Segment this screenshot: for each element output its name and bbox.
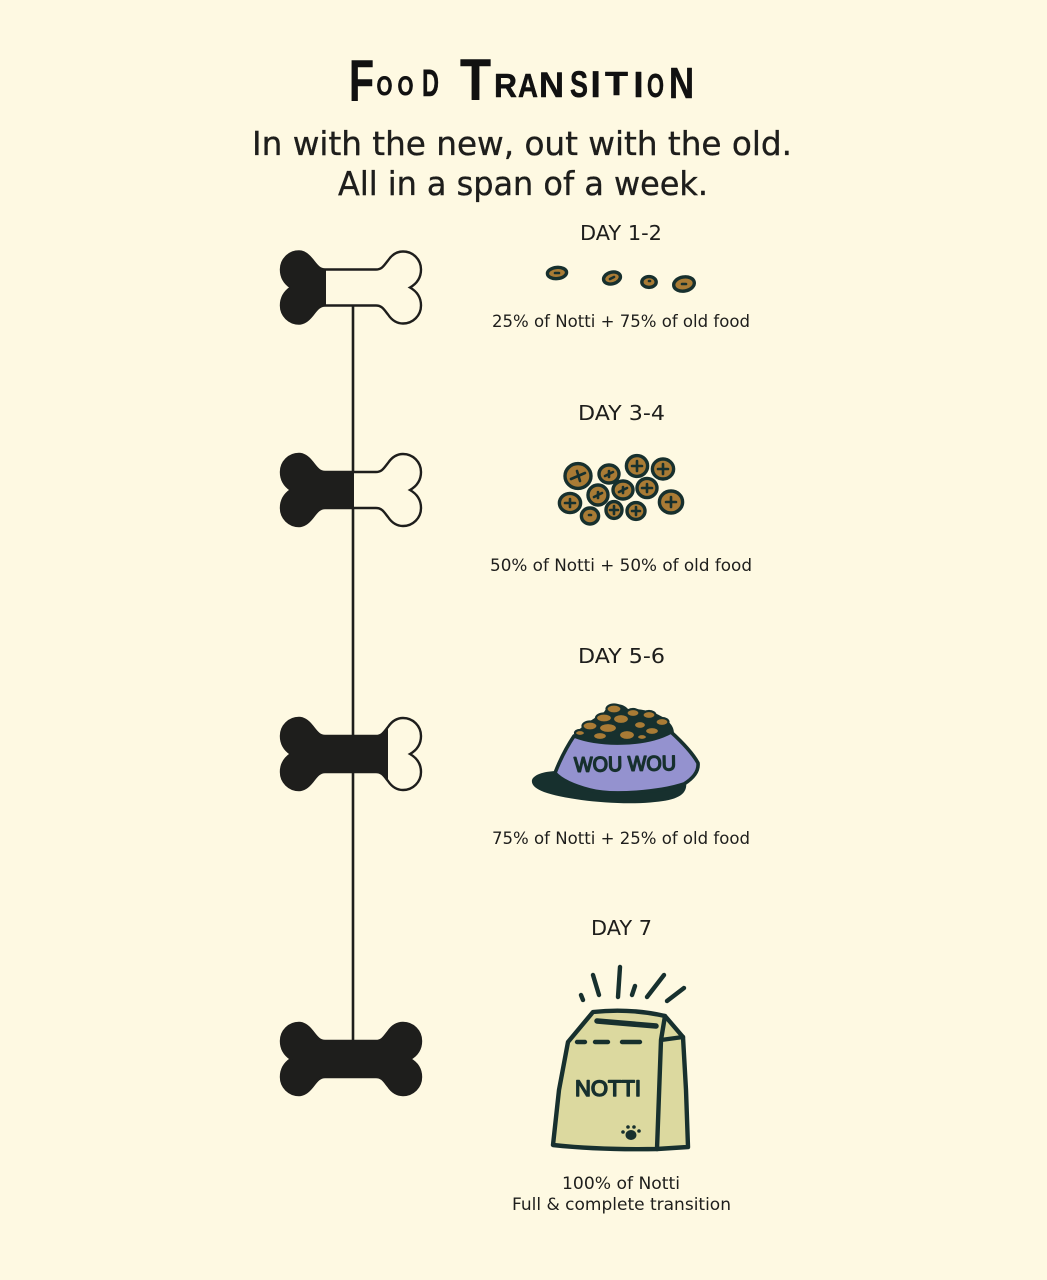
bowl shadow	[532, 771, 686, 803]
title: N	[669, 59, 694, 108]
day 7 caption: Full & complete transition	[512, 1195, 731, 1215]
title: T	[605, 65, 628, 102]
day 3-4 label: DAY 3-4	[578, 401, 665, 425]
day 1-2 caption: 25% of Notti + 75% of old food	[492, 312, 750, 332]
bag brand: NOTTI	[575, 1076, 641, 1101]
day 5-6 caption: 75% of Notti + 25% of old food	[492, 829, 750, 849]
title: O	[376, 71, 392, 101]
step: day 7	[512, 916, 731, 1215]
bag folds and handle	[577, 1016, 683, 1149]
title: O	[647, 67, 664, 104]
day 7 caption: 100% of Notti	[562, 1174, 680, 1194]
step: day 3-4	[490, 401, 752, 576]
title: A	[518, 67, 538, 104]
day 7 caption	[512, 1174, 731, 1215]
bone: fully filled	[281, 1023, 421, 1095]
bowl lettering: WOU WOU	[574, 752, 676, 777]
step: day 5-6	[492, 644, 750, 849]
icon: paw	[621, 1125, 641, 1140]
icon: kibble pile	[559, 456, 683, 524]
bone: 75 percent filled	[281, 718, 421, 790]
step: day 1-2	[492, 221, 750, 332]
subtitle	[252, 125, 792, 203]
day 1-2 label: DAY 1-2	[580, 221, 662, 245]
bone: 50 percent filled	[281, 454, 421, 526]
day 5-6 label: DAY 5-6	[578, 644, 665, 668]
day 7 label: DAY 7	[591, 916, 652, 940]
title	[349, 48, 694, 114]
icon: food bowl	[532, 704, 698, 803]
bowl body	[555, 732, 698, 793]
day 3-4 caption: 50% of Notti + 50% of old food	[490, 556, 752, 576]
timeline line	[352, 305, 354, 1042]
title: N	[539, 66, 564, 105]
icon: four kibbles	[547, 267, 695, 293]
bag body	[553, 1011, 688, 1149]
title: D	[422, 63, 439, 105]
subtitle: In with the new, out with the old.	[252, 125, 792, 163]
title: S	[570, 64, 588, 105]
title: T	[460, 48, 491, 113]
subtitle: All in a span of a week.	[338, 165, 708, 203]
title: I	[590, 64, 601, 105]
icon: food bag	[553, 967, 688, 1149]
radiating lines	[581, 967, 684, 1001]
kibble heap	[574, 704, 674, 745]
bone: 25 percent filled	[281, 252, 421, 324]
title: O	[398, 71, 414, 101]
title: F	[349, 49, 374, 114]
title: I	[634, 64, 644, 105]
title: R	[494, 67, 517, 104]
